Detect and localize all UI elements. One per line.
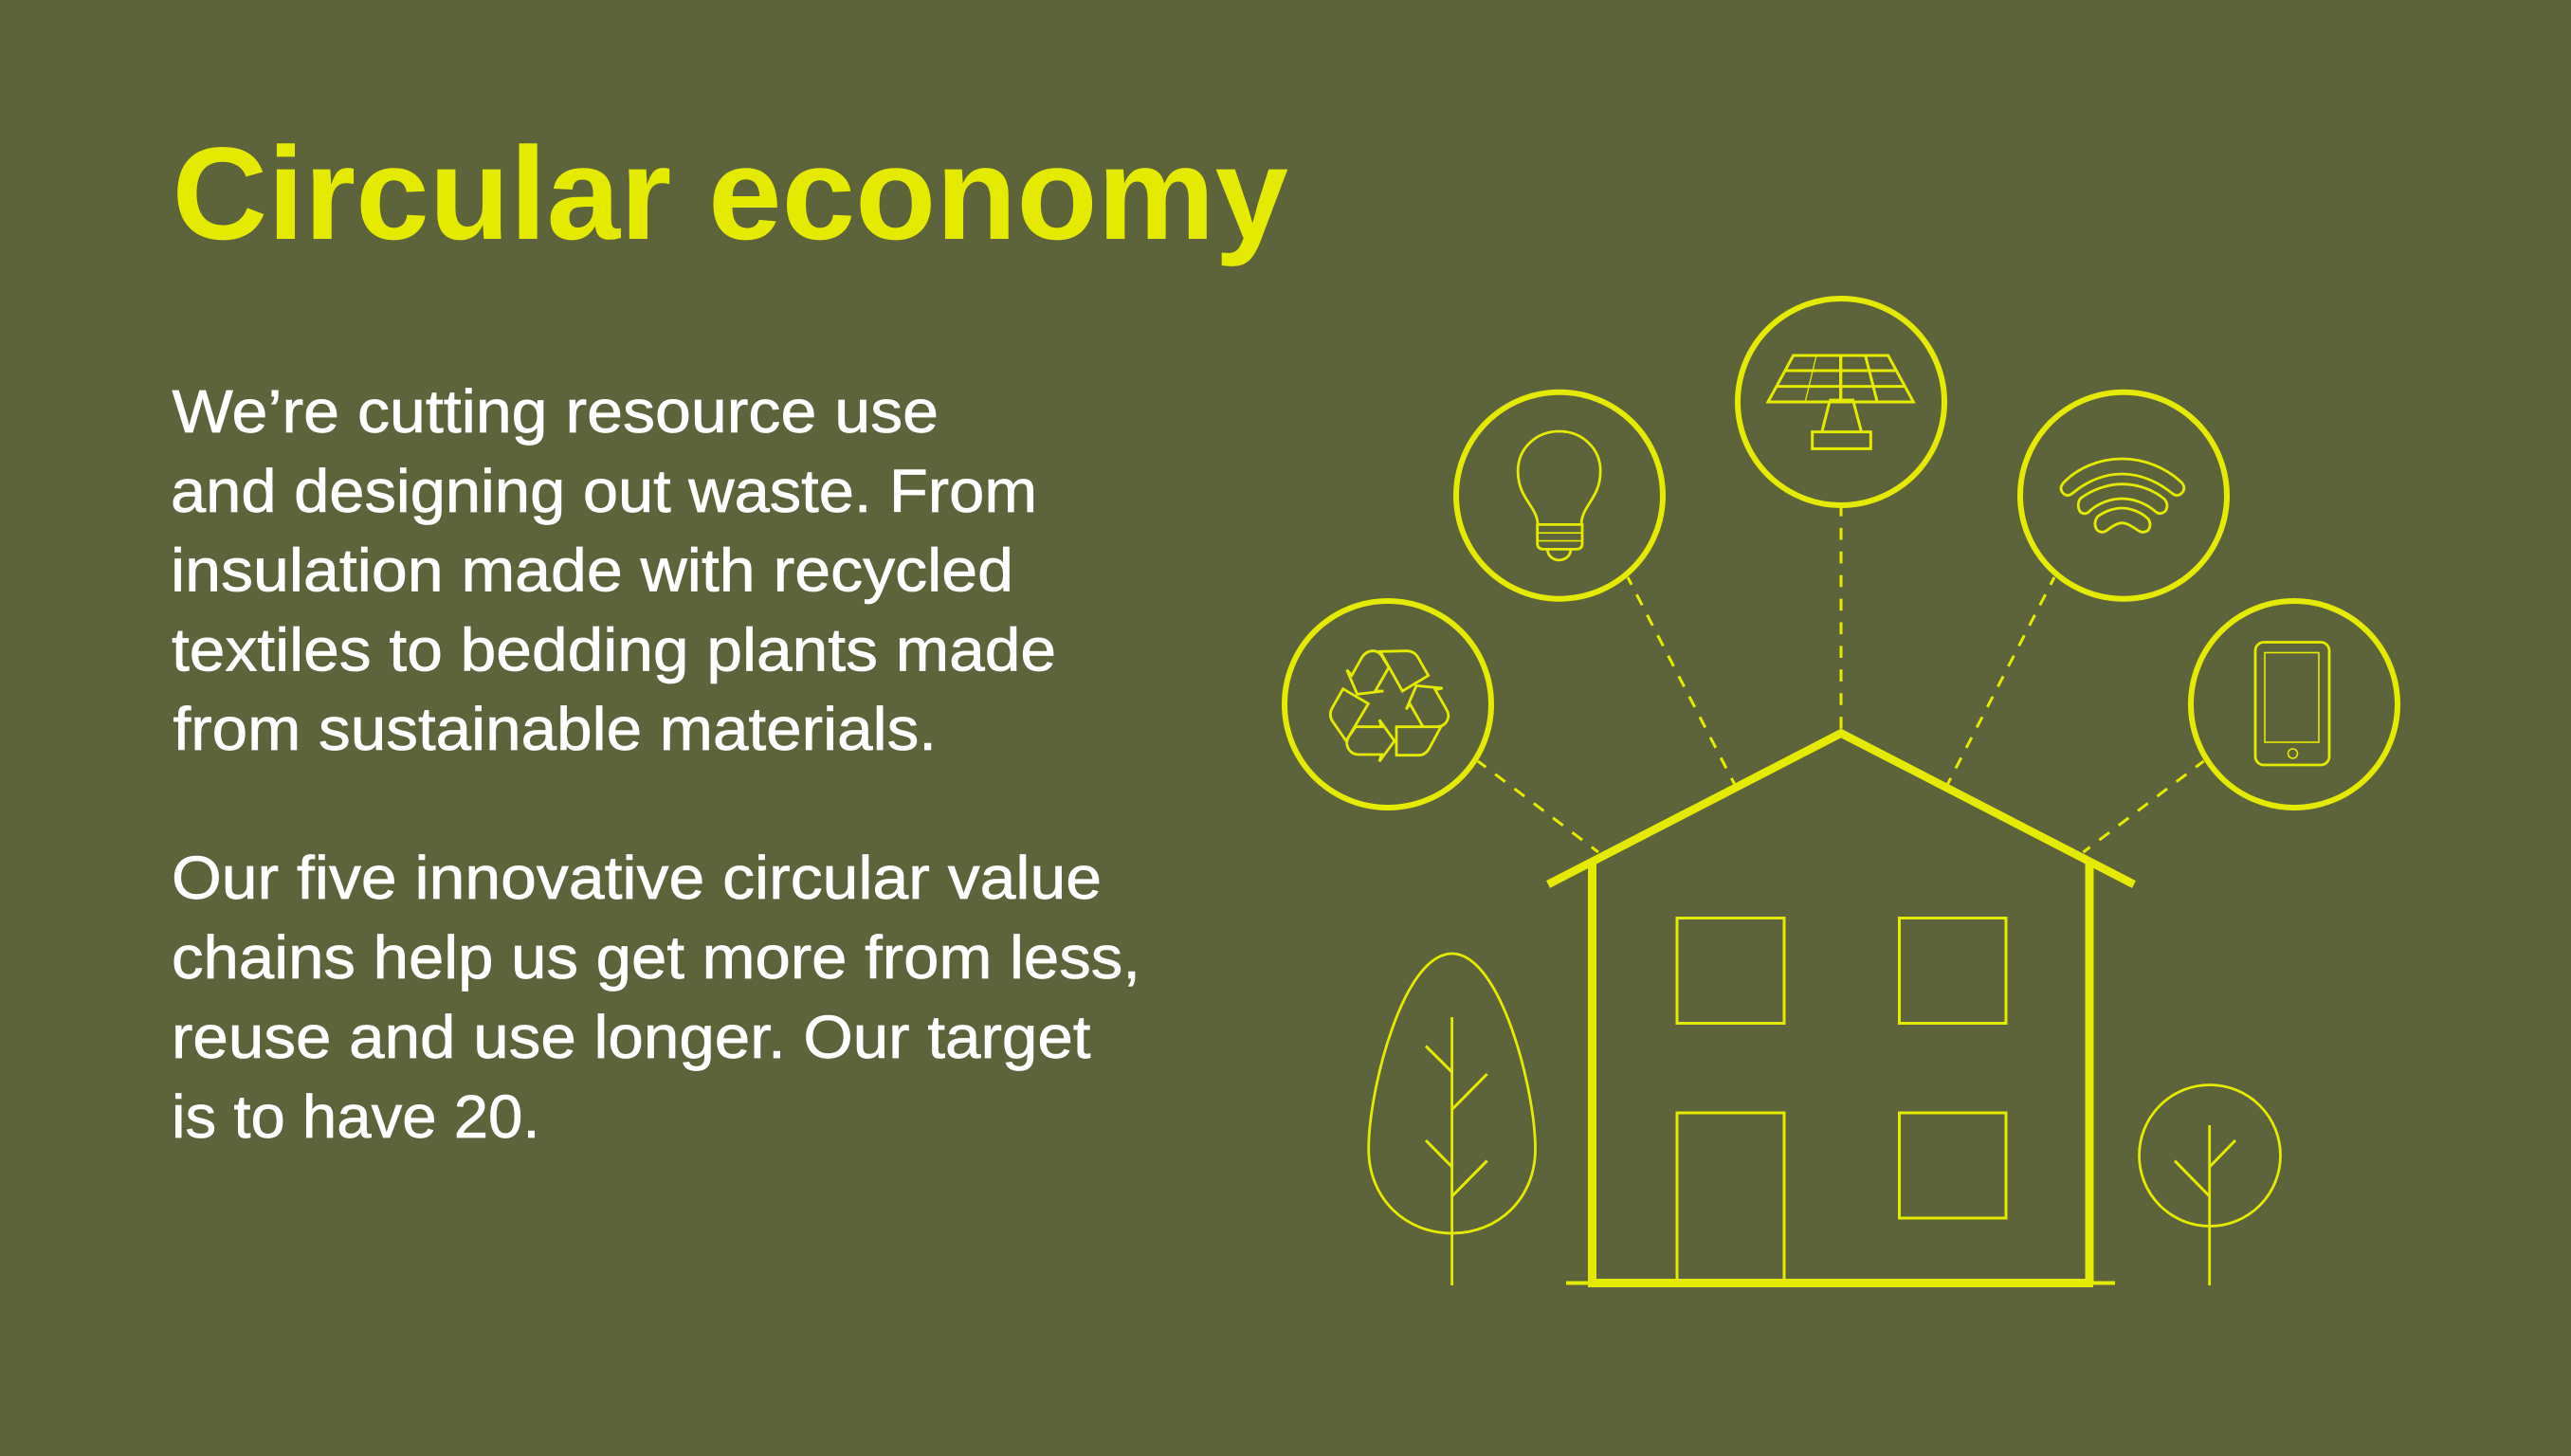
dashed connector: solar panel to roof: [1839, 508, 1843, 729]
window: upper left: [1677, 918, 1784, 1024]
icon: light bulb circle: [1456, 392, 1663, 599]
roof: [1548, 734, 2134, 884]
text block: first paragraph: [171, 377, 1056, 763]
text block: first paragraph: We’re cutting resource use: [173, 377, 939, 446]
icon: phone circle: [2191, 601, 2398, 808]
ground line: [1566, 1282, 2115, 1285]
walls: [1593, 863, 2089, 1283]
door: [1677, 1113, 1784, 1279]
text block: second paragraph: Our five innovative circular value: [172, 844, 1102, 912]
house: [1548, 734, 2134, 1283]
text block: second paragraph: chains help us get more from less,: [172, 923, 1140, 992]
icon: solar panel circle: [1738, 299, 1944, 505]
window: upper right: [1900, 918, 2006, 1024]
dashed connector: phone to roof: [2084, 761, 2203, 852]
dashed connector: bulb to roof: [1628, 577, 1735, 784]
tree: small right tree: [2139, 1084, 2281, 1285]
window: lower right: [1900, 1113, 2006, 1218]
text block: first paragraph: from sustainable materials.: [173, 695, 937, 763]
text block: second paragraph: is to have 20.: [172, 1083, 540, 1151]
dashed connector: recycling to roof: [1478, 761, 1598, 852]
text block: first paragraph: insulation made with recycled: [171, 537, 1013, 605]
floor: [1588, 1279, 2093, 1287]
text block: second paragraph: reuse and use longer. Our target: [172, 1003, 1091, 1071]
text block: first paragraph: and designing out waste. From: [171, 457, 1037, 525]
text block: second paragraph: [172, 844, 1140, 1151]
icon: recycling circle: [1285, 601, 1491, 808]
text block: first paragraph: textiles to bedding plants made: [172, 616, 1056, 684]
icon: wifi circle: [2020, 392, 2227, 599]
title: Circular economy: [173, 120, 1288, 267]
dashed connector: wifi to roof: [1947, 577, 2054, 784]
tree: tall left tree: [1369, 954, 1536, 1285]
